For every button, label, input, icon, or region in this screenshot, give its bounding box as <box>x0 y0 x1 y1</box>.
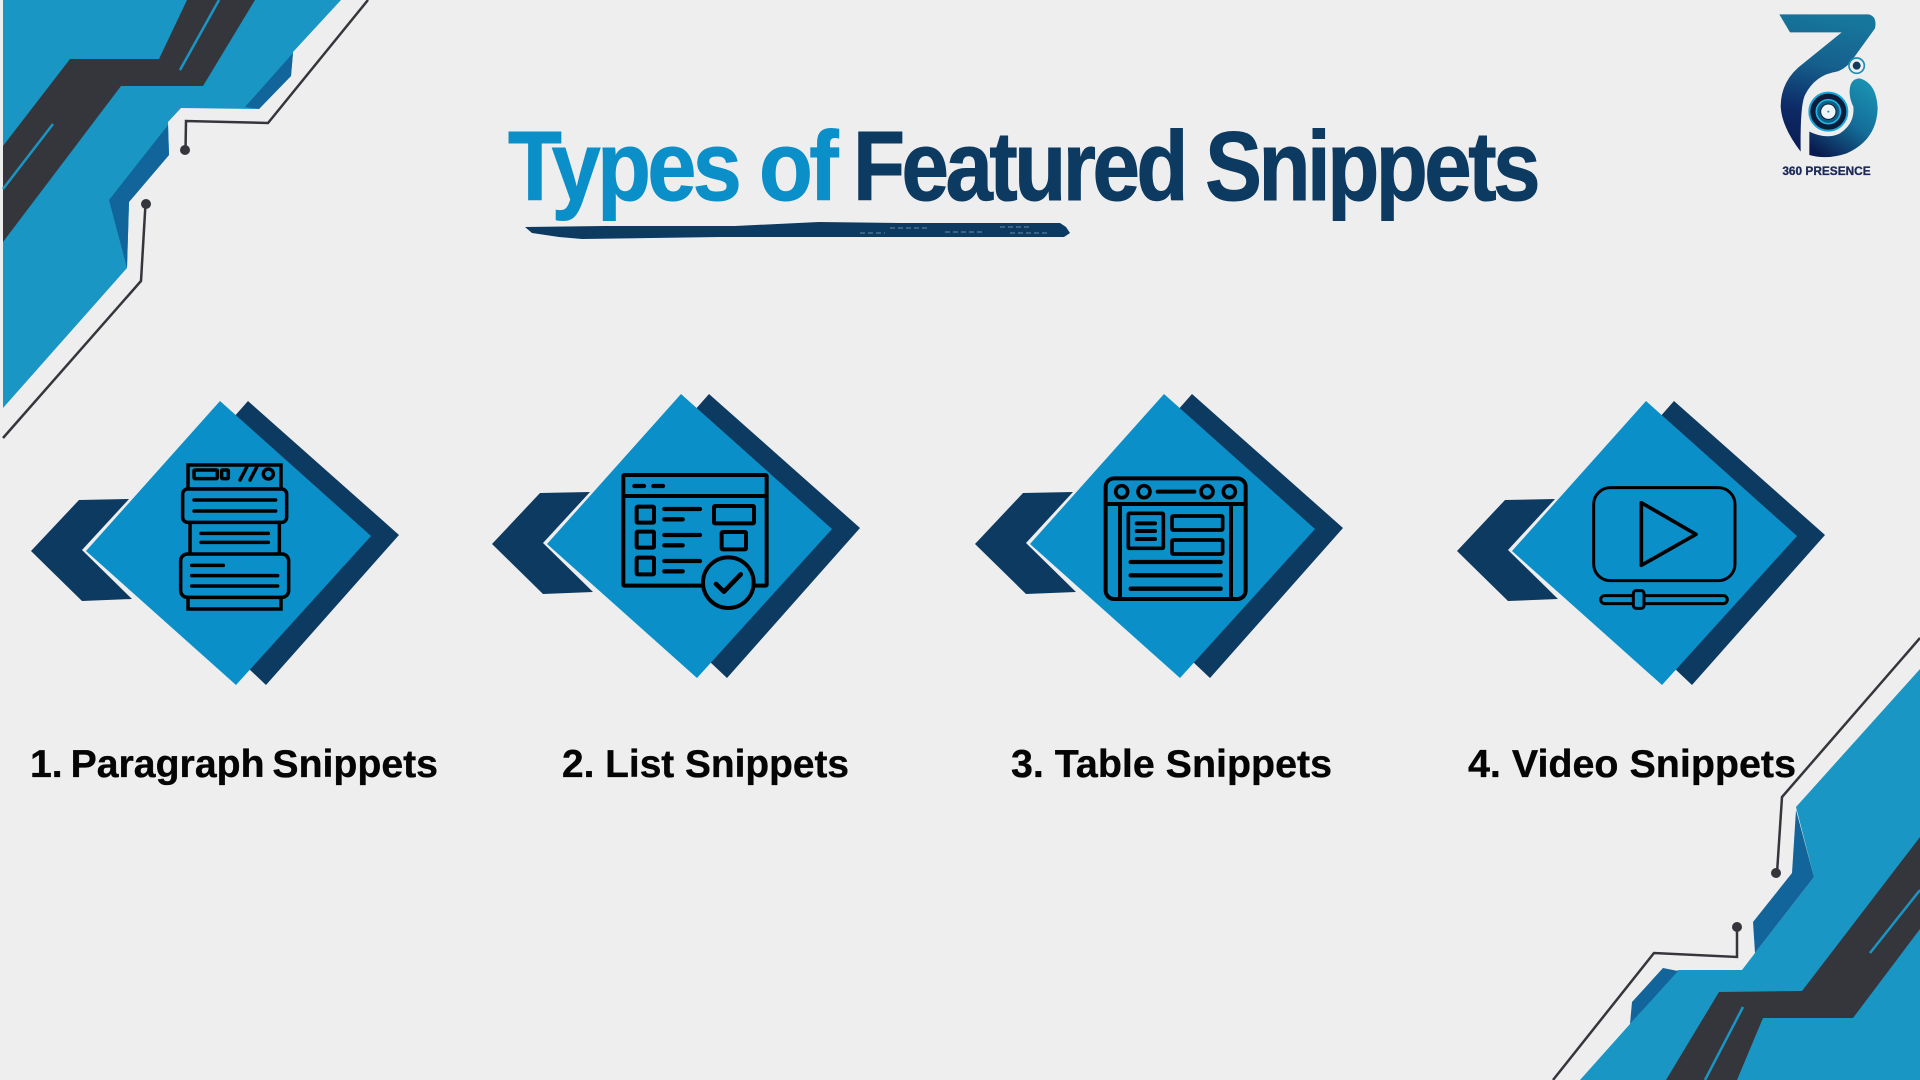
panel: list snippets <box>492 394 860 786</box>
label 4: 4. Video Snippets <box>1468 743 1796 786</box>
label 1: 1. Paragraph Snippets <box>30 743 438 786</box>
title: Types of <box>508 111 839 221</box>
icon: list window with check <box>623 475 767 608</box>
diamond badge 4 <box>1457 401 1825 685</box>
decoration: bottom-right corner <box>1553 638 1920 1080</box>
panel: table snippets <box>975 394 1343 786</box>
title <box>508 111 1537 221</box>
panel: paragraph snippets <box>30 401 438 786</box>
title: Featured Snippets <box>853 111 1537 221</box>
logo: 360 Presence: 360 PRESENCE <box>1782 164 1871 178</box>
panel: video snippets <box>1457 401 1825 786</box>
icon: stacked paragraph blocks <box>181 465 289 609</box>
title underline brush stroke <box>525 222 1070 239</box>
diamond badge 1 <box>31 401 399 685</box>
diamond badge 3 <box>975 394 1343 678</box>
icon: video player <box>1594 488 1735 608</box>
decoration: top-left corner <box>3 0 368 438</box>
icon: table window <box>1106 478 1246 599</box>
diamond badge 2 <box>492 394 860 678</box>
label 3: 3. Table Snippets <box>1011 743 1332 786</box>
logo: 360 Presence <box>1779 14 1878 178</box>
label 2: 2. List Snippets <box>562 743 849 786</box>
